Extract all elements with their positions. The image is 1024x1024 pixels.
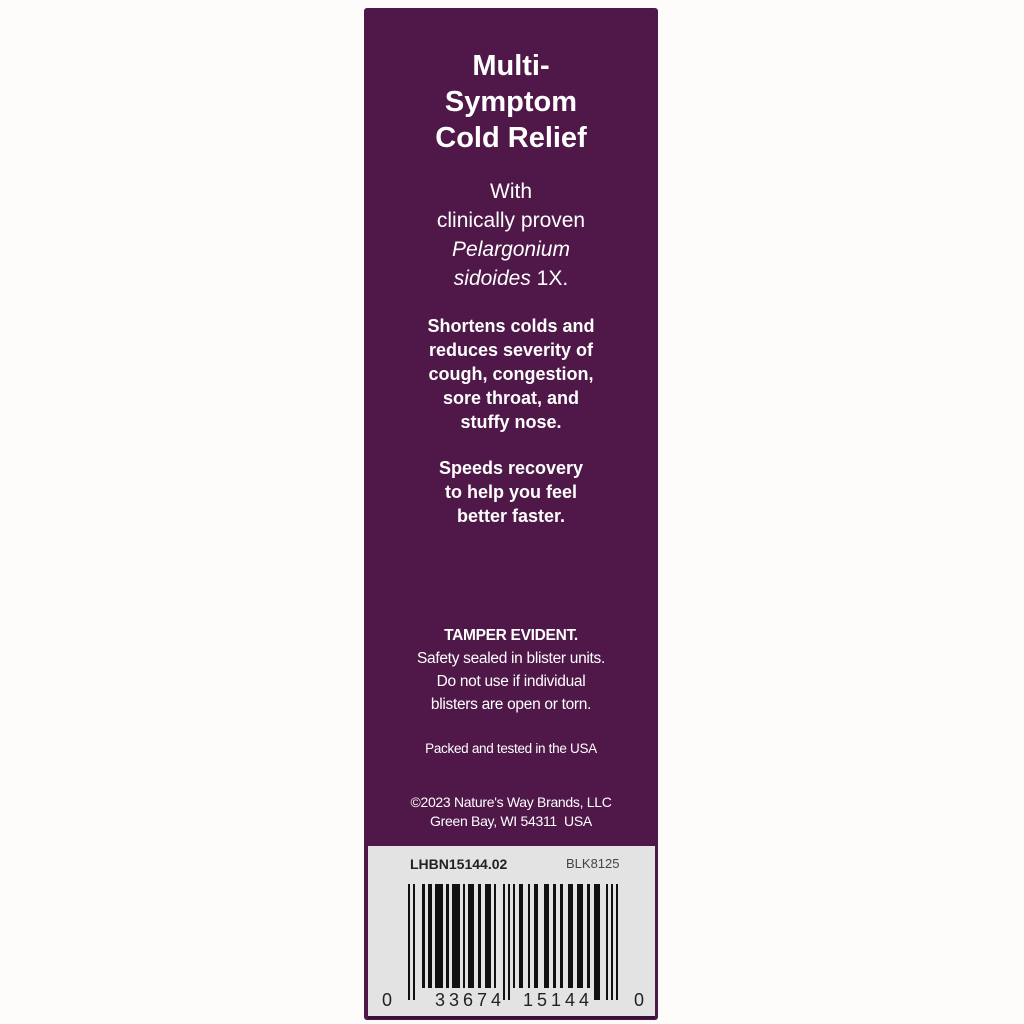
text block: recovery: better faster. [457, 506, 565, 526]
text block: copyright [410, 794, 612, 829]
text block: ingredient [437, 180, 585, 290]
text block: benefits: reduces severity of [429, 340, 593, 360]
text block: benefits [427, 316, 595, 432]
barcode: 15144 [523, 990, 593, 1010]
barcode label: LHBN15144.02 [410, 856, 507, 872]
text block: ingredient: With [490, 180, 532, 203]
text block: benefits: Shortens colds and [427, 316, 595, 336]
text block: tamper evident [417, 627, 605, 713]
title: Symptom [445, 86, 577, 118]
barcode: 0 [634, 990, 644, 1010]
barcode label: BLK8125 [566, 856, 620, 871]
text block: benefits: stuffy nose. [460, 412, 562, 432]
text block: recovery [439, 458, 583, 526]
text block: tamper evident: blisters are open or torn. [431, 696, 591, 713]
text block: benefits: cough, congestion, [428, 364, 594, 384]
title: Cold Relief [435, 122, 587, 154]
panel: product box side [364, 8, 658, 1020]
title: Multi- [472, 50, 550, 82]
barcode label [368, 846, 655, 1019]
barcode [382, 884, 644, 1010]
text block: recovery: Speeds recovery [439, 458, 583, 478]
barcode: 33674 [435, 990, 505, 1010]
text block: recovery: to help you feel [445, 482, 577, 502]
text block: tamper evident: Do not use if individual [437, 673, 585, 690]
text block: ingredient: clinically proven [437, 209, 585, 232]
text block: benefits: sore throat, and [443, 388, 579, 408]
text block: tamper evident: Safety sealed in blister units. [417, 650, 605, 667]
text block: ingredient: sidoides 1X. [454, 267, 568, 290]
title [435, 50, 587, 154]
barcode: 0 [382, 990, 392, 1010]
text block: ingredient: Pelargonium [452, 238, 570, 261]
text block: copyright: Green Bay, WI 54311 USA [430, 813, 592, 829]
text block: packed: Packed and tested in the USA [425, 741, 597, 756]
text block: tamper evident: TAMPER EVIDENT. [444, 627, 578, 644]
text block: copyright: ©2023 Nature's Way Brands, LLC [410, 794, 612, 810]
